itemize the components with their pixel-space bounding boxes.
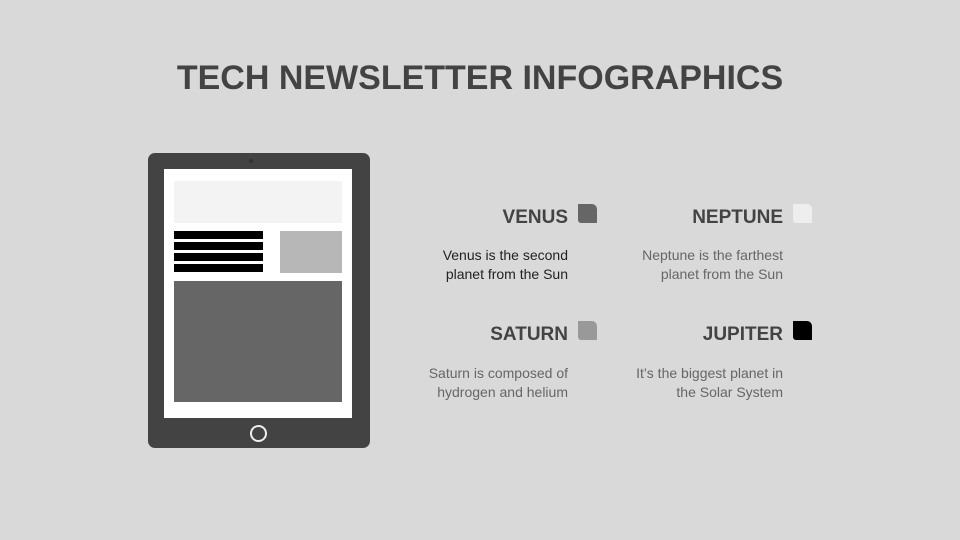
item: venus: VENUS (503, 207, 568, 228)
item: neptune: Neptune is the farthest (642, 247, 783, 263)
item: saturn: SATURN (490, 324, 568, 345)
icon: jupiter square (793, 321, 812, 340)
item: neptune: NEPTUNE (692, 207, 783, 228)
item: saturn (429, 321, 597, 400)
item: saturn: Saturn is composed of (429, 365, 568, 381)
item: jupiter (636, 321, 812, 400)
item: neptune: planet from the Sun (661, 266, 783, 282)
icon: venus square (578, 204, 597, 223)
header block (174, 181, 342, 223)
item: venus: planet from the Sun (446, 266, 568, 282)
screen (164, 169, 352, 418)
image block (280, 231, 342, 273)
icon: saturn square (578, 321, 597, 340)
item: neptune (642, 204, 812, 282)
item: jupiter: It’s the biggest planet in (636, 365, 783, 381)
home button (250, 425, 267, 442)
camera (249, 159, 253, 163)
item: venus: Venus is the second (443, 247, 568, 263)
item: saturn: hydrogen and helium (437, 384, 568, 400)
title: TECH NEWSLETTER INFOGRAPHICS (177, 59, 783, 97)
text lines (174, 231, 263, 272)
item: venus (442, 204, 597, 282)
item: jupiter: the Solar System (676, 384, 783, 400)
tablet illustration (148, 153, 370, 448)
icon: neptune square (793, 204, 812, 223)
item: jupiter: JUPITER (703, 324, 783, 345)
main image block (174, 281, 342, 402)
